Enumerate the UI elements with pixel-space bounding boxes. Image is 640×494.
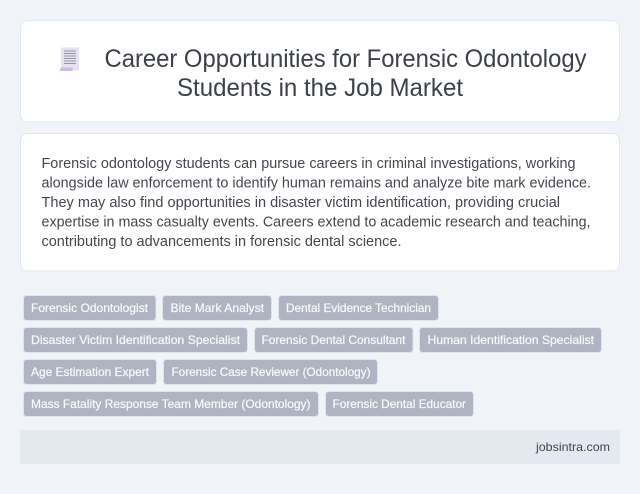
- panel: description: [20, 134, 620, 271]
- tag: Bite Mark Analyst: Bite Mark Analyst: [170, 301, 265, 315]
- tag: Forensic Odontologist: [24, 296, 156, 320]
- panel: header: [20, 20, 620, 122]
- tag: Age Estimation Expert: Age Estimation Expert: [31, 365, 150, 379]
- tag: Forensic Odontologist: Forensic Odontologist: [31, 301, 149, 315]
- tag: Human Identification Specialist: [420, 328, 602, 352]
- footer source text: jobsintra.com: [535, 440, 610, 454]
- tag: Mass Fatality Response Team Member (Odontology): [24, 392, 318, 416]
- tag: Forensic Dental Consultant: Forensic Dental Consultant: [262, 333, 406, 347]
- tag: Dental Evidence Technician: Dental Evidence Technician: [286, 301, 431, 315]
- tag: Age Estimation Expert: [24, 360, 156, 384]
- footer bar: [20, 430, 620, 464]
- tag: Forensic Case Reviewer (Odontology): Forensic Case Reviewer (Odontology): [172, 365, 370, 379]
- text block: description: expertise in mass casualty events. Careers extend to academic research and teaching,: [42, 215, 590, 231]
- tag: Human Identification Specialist: Human Identification Specialist: [428, 333, 595, 347]
- tag: Forensic Dental Educator: [326, 392, 474, 416]
- tag list: [24, 296, 602, 416]
- text block: description: contributing to advancements in forensic dental science.: [42, 234, 402, 250]
- tag: Disaster Victim Identification Specialist: Disaster Victim Identification Specialist: [31, 333, 241, 347]
- title: [104, 45, 587, 102]
- tag: Bite Mark Analyst: [162, 296, 272, 320]
- tag: Dental Evidence Technician: [278, 296, 438, 320]
- tag: Forensic Dental Consultant: [254, 328, 413, 352]
- tag: Disaster Victim Identification Specialist: [24, 328, 248, 352]
- icon: document scroll: [60, 48, 79, 71]
- text block: description: alongside law enforcement to identify human remains and analyze bite mark evidence.: [42, 176, 591, 192]
- tag: Forensic Case Reviewer (Odontology): [164, 360, 378, 384]
- text block: description: Forensic odontology students can pursue careers in criminal investigations, working: [42, 156, 576, 172]
- title: Career Opportunities for Forensic Odontology: [104, 45, 587, 73]
- tag: Mass Fatality Response Team Member (Odontology): Mass Fatality Response Team Member (Odontology): [31, 397, 310, 411]
- tag: Forensic Dental Educator: Forensic Dental Educator: [332, 397, 466, 411]
- text block: description: [42, 156, 591, 250]
- title: Students in the Job Market: [177, 74, 463, 102]
- text block: description: They may also find opportunities in disaster victim identification, providing crucial: [42, 195, 560, 211]
